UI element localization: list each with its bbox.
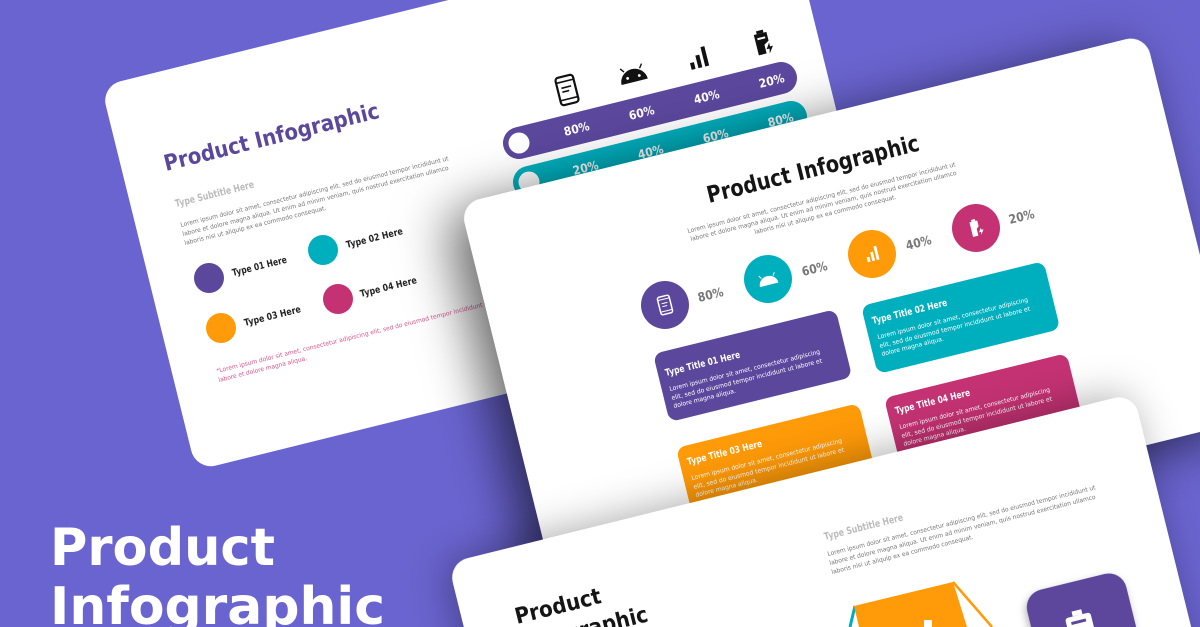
card: Type Title 03: Type Title 03 Here	[686, 439, 763, 468]
bar: purple percentages: 60%	[627, 103, 656, 123]
icon: signal bars	[687, 46, 709, 70]
panel: slide with product bars	[101, 0, 883, 470]
card: Type Title 04: dolore magna aliqua.	[903, 426, 967, 448]
card: Type Title 02	[861, 261, 1060, 374]
legend: Type 03 Here	[243, 304, 302, 329]
slide 2 body text: Lorem ipsum dolor sit amet, consectetur adipiscing elit, sed do eiusmod tempor incididunt ut	[687, 161, 957, 235]
bar: teal percentages: 40%	[636, 142, 665, 162]
diagram: product box	[850, 582, 992, 627]
card: Type Title 01: dolore magna aliqua.	[673, 388, 737, 410]
slide 1 body text: labore et dolore magna aliqua. Ut enim ad minim veniam, quis nostrud exercitation ullamco	[182, 165, 450, 238]
legend	[194, 226, 418, 343]
card: Type Title 03: Lorem ipsum dolor sit amet, consectetur adipiscing	[691, 438, 843, 482]
card: Type Title 01: Type Title 01 Here	[664, 350, 741, 379]
slide 2 body text: labore et dolore magna aliqua. Ut enim ad minim veniam, quis nostrud exercitation ullamco	[690, 170, 958, 243]
main title	[50, 518, 385, 627]
slide 1 body text: Lorem ipsum dolor sit amet, consectetur adipiscing elit, sed do eiusmod tempor incididunt ut	[180, 155, 450, 229]
panel: slide with product diagram	[448, 393, 1200, 627]
slide 3 card	[448, 393, 1200, 627]
bar: purple percentages	[508, 71, 786, 154]
card: Type Title 01: elit, sed do eiusmod tempor incididunt ut labore et	[671, 358, 823, 402]
bar: teal percentages: 60%	[701, 126, 730, 146]
card: Type Title 04: elit, sed do eiusmod tempor incididunt ut labore et	[901, 396, 1053, 440]
legend: Type 01 Here	[231, 255, 288, 279]
card: Type Title 04: Type Title 04 Here	[894, 388, 971, 417]
footnote: *Lorem ipsum dolor sit amet, consectetur adipiscing elit, sed do eiusmod tempor incididunt ut	[216, 300, 492, 375]
slide 1 title: Product Infographic	[161, 99, 382, 177]
bar: purple percentages: 20%	[757, 71, 786, 91]
card: Type Title 03	[676, 403, 875, 516]
stat: 60%: 60%	[800, 258, 829, 279]
bar: purple percentages: 80%	[562, 119, 591, 139]
panel: slide with percentage circles and cards	[460, 34, 1200, 591]
stat: 60%	[744, 255, 829, 303]
slide 3 body text: Lorem ipsum dolor sit amet, consectetur adipiscing elit, sed do eiusmod tempor incididunt ut	[827, 484, 1097, 558]
icon: phone	[555, 74, 579, 106]
slide 3 body text: laboris nisi ut aliquip ex ea commodo consequat.	[831, 534, 974, 576]
stat: 80%: 80%	[696, 284, 725, 305]
legend: Type 02 Here	[345, 226, 404, 251]
icon: charging battery	[753, 28, 775, 56]
card: Type Title 02: Type Title 02 Here	[871, 298, 948, 327]
card: Type Title 04: Lorem ipsum dolor sit amet, consectetur adipiscing	[899, 387, 1051, 431]
bar: teal percentages	[518, 110, 795, 192]
slide 1 card	[101, 0, 883, 470]
bar: purple percentages: 40%	[692, 87, 721, 107]
card: Type Title 02: elit, sed do eiusmod tempor incididunt ut labore et	[879, 306, 1031, 350]
stat: 40%: 40%	[904, 232, 933, 253]
slide 1 body text: laboris nisi ut aliquip ex ea commodo consequat.	[184, 205, 327, 247]
card: Type Title 04	[884, 353, 1083, 466]
stat: 40%	[848, 230, 933, 278]
card: Type Title 02: dolore magna aliqua.	[881, 336, 945, 358]
stat: 20%: 20%	[1007, 206, 1036, 227]
icon: android	[618, 63, 648, 85]
bar: teal percentages: 80%	[766, 110, 795, 130]
card: Type Title 01	[653, 309, 852, 422]
icon tile: battery	[1023, 570, 1146, 627]
slide 2 card	[460, 34, 1200, 591]
stat: 80%	[641, 281, 725, 329]
stat: 20%	[952, 204, 1036, 252]
slide 1 subtitle: Type Subtitle Here	[174, 180, 255, 210]
card: Type Title 02: Lorem ipsum dolor sit amet, consectetur adipiscing	[877, 297, 1029, 341]
card: Type Title 03: elit, sed do eiusmod tempor incididunt ut labore et	[693, 447, 845, 491]
slide 2 title: Product Infographic	[704, 131, 922, 209]
slide 3 subtitle: Type Subtitle Here	[823, 513, 904, 543]
card: Type Title 01: Lorem ipsum dolor sit amet, consectetur adipiscing	[669, 349, 821, 393]
slide 3 body text: labore et dolore magna aliqua. Ut enim ad minim veniam, quis nostrud exercitation ullamco	[829, 494, 1097, 567]
bar: teal percentages: 20%	[571, 158, 600, 178]
card: Type Title 03: dolore magna aliqua.	[695, 477, 759, 499]
legend: Type 04 Here	[359, 275, 418, 300]
slide 2 body text: laboris nisi ut aliquip ex ea commodo consequat.	[754, 194, 897, 236]
main title: Product	[50, 518, 275, 578]
footnote: labore et dolore magna aliqua.	[218, 355, 308, 384]
